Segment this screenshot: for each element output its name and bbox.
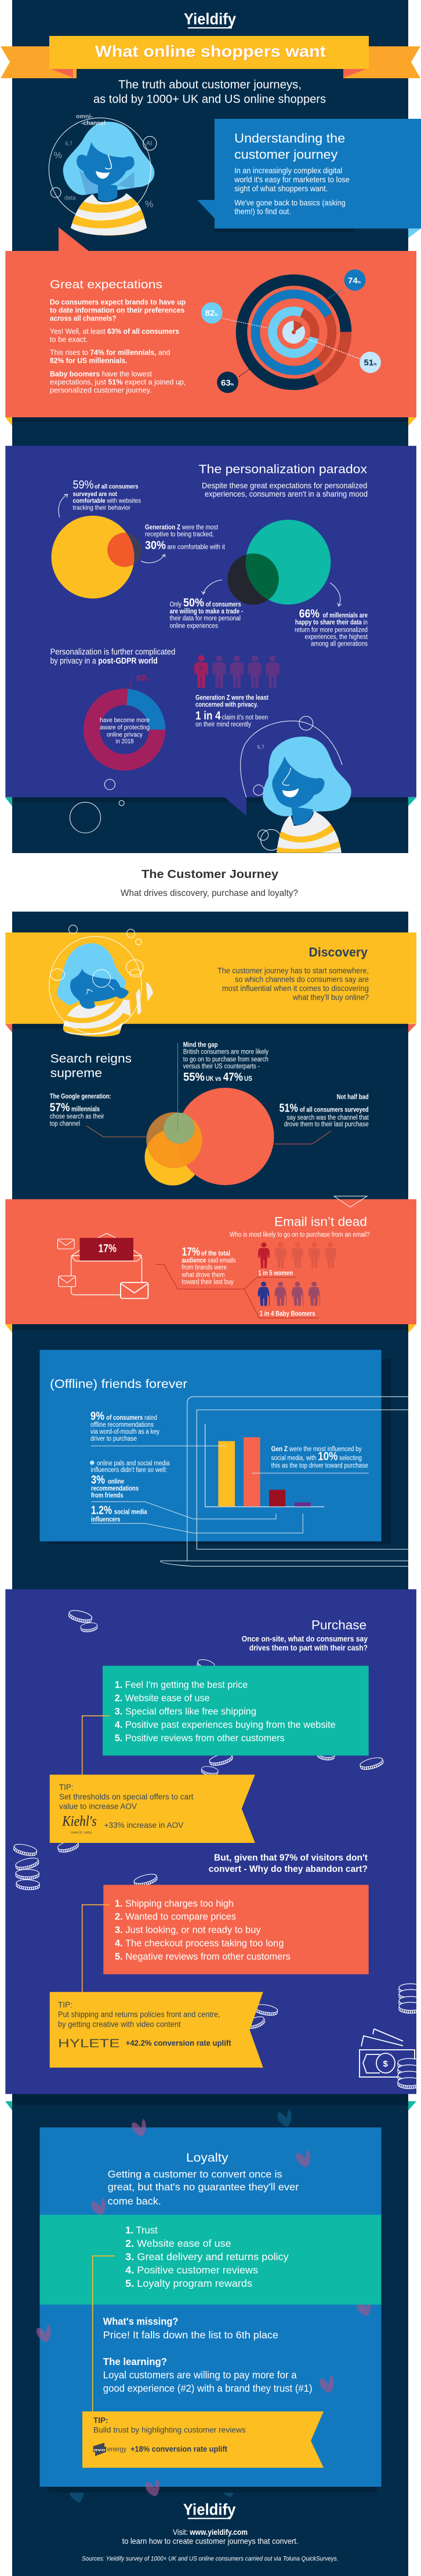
illustration: smiling woman with data ring: omni- (76, 113, 93, 120)
icon: envelope with 17% card (58, 1233, 148, 1299)
arrow: to 66% (331, 583, 342, 606)
callout: tip Kiehl's: Set thresholds on special offers to cart (59, 1792, 194, 1801)
logo: Yieldify footer: Yieldify (183, 2500, 236, 2518)
list: abandon reasons (103, 1885, 369, 1974)
icon: laptop outline (160, 1397, 408, 1566)
list: purchase drivers (103, 1666, 369, 1755)
stat text: google generation (50, 1094, 111, 1128)
connector: tip 1 (82, 1716, 110, 1775)
stat text: 50%: online experiences (170, 622, 218, 629)
stat text: gen z social: social media, with 10% selecting (271, 1450, 362, 1463)
text block: what's missing: What's missing? (103, 2316, 178, 2327)
stat text: generation Z 30%: Generation Z were the most (145, 524, 219, 531)
list: loyalty drivers (39, 2215, 382, 2305)
stat text: online pals: 3% (91, 1474, 105, 1486)
chart: concentric expectation rings (222, 263, 363, 402)
stat text: online pals: online pals and social media (97, 1460, 170, 1467)
stat text: not half bad (280, 1094, 369, 1128)
heading: search reigns supreme (50, 1052, 132, 1080)
stat text: 59%: surveyed are not (73, 491, 117, 498)
leader lines: email (155, 1265, 319, 1318)
arrow: to 50% (202, 580, 222, 594)
callout: tip Kiehl's (50, 1775, 255, 1843)
chart: privacy donut 82%: have become more (100, 717, 150, 724)
panel: great expectations (5, 227, 416, 426)
stat text: 50%: of consumers (206, 602, 241, 609)
text block: discovery copy: what they'll buy online? (292, 993, 369, 1002)
stat text: 17%: audience said emails (182, 1258, 236, 1265)
stat text: mind the gap: versus their US counterparts - (183, 1063, 260, 1070)
stat text: 17%: from brands were (182, 1265, 227, 1271)
stat text: online pals: influencers (91, 1516, 120, 1523)
text block: loyalty intro: come back. (108, 2195, 161, 2207)
panel: loyalty (37, 2119, 382, 2497)
text block: understanding intro: In an increasingly complex digital (234, 166, 342, 175)
stat bubble: 82% (201, 303, 223, 323)
text block: expectations copy: 82% for US millennials. (50, 357, 128, 365)
callout: tip OVO energy: Build trust by highlighting customer reviews (93, 2426, 246, 2435)
heading: offline friends: (Offline) friends forever (50, 1377, 187, 1391)
icon: five women (258, 1243, 336, 1268)
callout: tip Kiehl's: TIP: (59, 1783, 74, 1791)
heading: understanding (234, 131, 345, 162)
stat text: online pals: social media (114, 1509, 147, 1515)
connector: tip 3 (93, 2256, 115, 2411)
illustration: woman concerned with privacy (257, 737, 351, 853)
text block: abandon question (209, 1853, 368, 1874)
stat text: generation Z 30% (145, 524, 226, 552)
text block: expectations copy: Baby boomers have the lowest (50, 370, 153, 378)
stat text: 59%: of all consumers (95, 483, 138, 490)
stat text: 17%: 17% (182, 1246, 200, 1259)
chart: social drivers bars (205, 1424, 324, 1507)
list: loyalty drivers: 4. Positive customer reviews (125, 2264, 258, 2276)
text block: expectations copy: Yes! Well, at least 63% of all consumers (50, 327, 179, 336)
venn: tracking comfort (51, 516, 141, 599)
list: abandon reasons: 5. Negative reviews from other customers (115, 1951, 291, 1962)
text block: understanding intro: them!) to find out. (234, 206, 291, 216)
heading: loyalty: Loyalty (186, 2151, 228, 2165)
text block: understanding intro: sight of what shoppers want. (234, 184, 328, 193)
list: purchase drivers: 5. Positive reviews from other customers (115, 1732, 285, 1743)
stat text: 1 in 4: Generation Z were the least (195, 695, 268, 702)
illustration: smiling woman with data ring: % (145, 199, 153, 209)
stat text: 1 in 4: on their mind recently (195, 722, 251, 728)
callout: tip OVO energy: ovo (94, 2448, 106, 2453)
text block: expectations copy: expectations, just 51% expect a joined up, (50, 378, 186, 386)
icons: dark hearts behind loyalty card (69, 2109, 292, 2502)
callout: tip OVO energy: energy (107, 2445, 126, 2453)
text block: discovery copy: most influential when it comes to discovering (222, 983, 369, 993)
text block: discovery copy (217, 965, 369, 1002)
stat text: 66%: experiences, the highest (305, 634, 368, 641)
illustration: smiling woman with data ring: AI (146, 140, 152, 147)
stat text: 50%: 50% (183, 597, 204, 610)
stat bubble: 74% (344, 269, 365, 291)
text block: what's missing (103, 2316, 278, 2341)
list: abandon reasons: 4. The checkout process taking too long (115, 1937, 284, 1948)
subheading: what drives discovery: What drives discovery, purchase and loyalty? (121, 888, 298, 898)
stat text: google generation: 57% (50, 1102, 70, 1114)
stat text: online pals (90, 1460, 170, 1523)
stat text: gen z social (271, 1446, 368, 1470)
venn: data trade (227, 520, 331, 605)
callout: tip Hylete: Put shipping and returns policies front and centre, (58, 2010, 220, 2019)
text block: the learning: The learning? (103, 2356, 167, 2367)
stat text: online pals: from friends (91, 1492, 123, 1499)
heading: personalization paradox: The personalization paradox (199, 463, 368, 476)
text block: discovery copy: so which channels do consumers say are (235, 975, 369, 984)
callout: tip OVO energy: +18% conversion rate uplift (130, 2445, 227, 2454)
icon: banknote and coins: $ (383, 2059, 389, 2069)
callout: tip Kiehl's: Kiehl's (62, 1814, 97, 1830)
label: 1 in 4 baby boomers: 1 in 4 Baby Boomers (260, 1311, 315, 1318)
stat text: mind the gap: Mind the gap (183, 1042, 218, 1049)
subtitle (93, 79, 326, 106)
decorative data circles around privacy woman (70, 716, 342, 850)
text block: the learning: good experience (#2) with a brand they trust (#1) (103, 2382, 313, 2394)
illustration: smiling woman with data ring: data (64, 195, 76, 201)
banner ribbon with title: What online shoppers want (95, 42, 326, 60)
stat text: google generation: top channel (50, 1121, 80, 1128)
stat text: 17%: what drove them (182, 1272, 225, 1279)
leader lines: search venn (86, 1043, 331, 1144)
callout: tip OVO energy (82, 2411, 324, 2468)
stat text: 50% (170, 597, 243, 629)
chart: privacy donut 82% (89, 673, 160, 765)
list: purchase drivers: 4. Positive past experiences buying from the website (115, 1719, 336, 1730)
chart: privacy donut 82%: 82% (136, 673, 150, 683)
panel: the personalization paradox (5, 446, 416, 816)
banner ribbon with title (1, 36, 420, 78)
stat text: generation Z 30%: are comfortable with it (167, 544, 226, 551)
heading: understanding: customer journey (234, 147, 337, 162)
list: abandon reasons: 3. Just looking, or not ready to buy (115, 1925, 261, 1936)
stat bubble: 63% (217, 371, 238, 393)
heading: purchase: Purchase (311, 1618, 366, 1633)
subtitle: as told by 1000+ UK and US online shoppers (93, 93, 326, 106)
stat text: google generation: The Google generation: (50, 1094, 111, 1101)
label: 1 in 5 women: 1 in 5 women (258, 1270, 293, 1277)
text block: understanding intro: We've gone back to basics (asking (234, 198, 346, 207)
stat text: 50%: their data for more personal (170, 615, 241, 622)
icon: envelope with 17% card: 17% (99, 1243, 117, 1255)
text block: expectations copy: across all channels? (50, 314, 116, 322)
stat bubble: 82%: 82% (205, 308, 218, 318)
logo: Yieldify top: Yieldify (184, 10, 236, 28)
stat text: online pals: recommendations (91, 1485, 139, 1492)
stat text: online pals: influencers didn't fare so well: (90, 1467, 167, 1474)
text block: loyalty intro (108, 2169, 299, 2207)
text block: paradox intro (202, 481, 368, 498)
heading: the customer journey: The Customer Journey (141, 868, 279, 881)
stat bubble: 63%: 63% (221, 378, 234, 388)
text block: purchase question: Once on-site, what do consumers say (242, 1634, 368, 1643)
stat text: generation Z 30%: receptive to being tracked, (145, 531, 214, 538)
text block: footer call to action: Visit: www.yieldify.com (173, 2527, 248, 2537)
stat text: gen z social: Gen Z were the most influenced by (271, 1446, 362, 1453)
text block: GDPR: by privacy in a post-GDPR world (50, 656, 158, 666)
stat text: 17% (182, 1246, 236, 1286)
icon: five generation Z figures (194, 655, 280, 688)
illustration: smiling woman with data ring: 6,7 (65, 141, 72, 147)
icons: pink hearts over loyalty card (37, 2119, 371, 2497)
stat text: 66%: happy to share their data in (295, 620, 368, 626)
stat text: 9%: 9% (90, 1410, 104, 1423)
stat text: 59%: tracking their behavior (73, 504, 130, 511)
list: purchase drivers: 2. Website ease of use (115, 1692, 210, 1703)
panel: email isn't dead (5, 1196, 416, 1333)
stat text: not half bad: say search was the channel that (286, 1114, 369, 1121)
stat text: 66%: among all generations (311, 641, 368, 648)
panel: (offline) friends forever (39, 1350, 408, 1566)
venn: search channels (145, 1088, 274, 1186)
stat text: 1 in 4: claim it's not been (222, 715, 268, 722)
stat text: 17%: toward their last buy (182, 1279, 234, 1286)
stat bubble: 74%: 74% (348, 276, 361, 286)
text block: expectations copy: This rises to 74% for millennials, and (50, 349, 170, 357)
stat text: google generation: millennials (71, 1106, 100, 1113)
callout: tip Kiehl's: value to increase AOV (59, 1802, 137, 1811)
stat text: 50%: are willing to make a trade - (170, 609, 243, 615)
text block: purchase question: drives them to part with their cash? (249, 1643, 368, 1652)
callout: tip OVO energy: TIP: (93, 2416, 108, 2425)
stat text: 66%: return for more personalized (295, 627, 368, 634)
icon: four baby boomers (258, 1282, 320, 1306)
stat text: 59% (73, 479, 141, 511)
stat text: not half bad: of all consumers surveyed (300, 1106, 369, 1113)
list: loyalty drivers: 5. Loyalty program rewards (125, 2278, 252, 2289)
callout: tip Hylete: HYLETE (58, 2038, 119, 2050)
stat text: mind the gap (183, 1042, 268, 1084)
stat text: online pals: 1.2% (91, 1504, 112, 1517)
stat text: online pals: online (108, 1478, 124, 1485)
text block: what's missing: Price! It falls down the list to 6th place (103, 2329, 278, 2341)
text block: discovery copy: The customer journey has to start somewhere, (217, 965, 369, 975)
text block: footer call to action: to learn how to create customer journeys that convert. (122, 2537, 298, 2546)
callout: tip Kiehl's: +33% increase in AOV (104, 1821, 183, 1830)
background: navy page panel lower (12, 912, 408, 2576)
list: purchase drivers: 1. Feel I'm getting the best price (115, 1679, 248, 1690)
stat text: 9%: of consumers rated (106, 1415, 157, 1422)
stat text: 9%: offline recommendations (90, 1422, 154, 1429)
panel: understanding the customer journey (197, 119, 421, 238)
stat text: 9%: driver to purchase (90, 1435, 137, 1442)
icon: banknote and coins (360, 2029, 421, 2089)
text block: expectations copy: to be exact. (50, 336, 88, 344)
illustration: smiling woman with data ring: -channel (81, 120, 106, 127)
text block: purchase question (242, 1634, 368, 1652)
panel: purchase (5, 1589, 421, 2111)
list: purchase drivers: 3. Special offers like free shipping (115, 1706, 256, 1717)
text block: loyalty intro: great, but that's no guarantee they'll ever (108, 2181, 299, 2192)
stat text: 66% (295, 608, 368, 648)
stat bubble: 51%: 51% (364, 358, 377, 368)
stat text: mind the gap: US (244, 1076, 252, 1083)
heading: great expectations: Great expectations (50, 279, 162, 292)
stat text: generation Z 30%: 30% (145, 539, 166, 552)
stat text: 59%: 59% (73, 479, 94, 491)
list: abandon reasons: 1. Shipping charges too high (115, 1898, 234, 1909)
text block: abandon question: convert - Why do they abandon cart? (209, 1864, 368, 1874)
text block: GDPR (50, 647, 175, 666)
chart: privacy donut 82%: in 2018 (116, 738, 133, 745)
illustration: woman concerned with privacy: 6,7 (257, 744, 264, 750)
stat text: gen z social: this as the top driver toward purchase (271, 1463, 368, 1470)
background: navy page panel top (12, 0, 408, 853)
stat text: 66%: of millennials are (322, 613, 368, 620)
text block: paradox intro: Despite these great expectations for personalized (202, 481, 367, 490)
stat text: 17%: of the total (201, 1251, 230, 1258)
arrow: to 59% (59, 494, 68, 518)
list: loyalty drivers: 3. Great delivery and returns policy (125, 2251, 289, 2262)
text block: loyalty intro: Getting a customer to convert once is (108, 2169, 282, 2180)
stat bubble: 51% (360, 352, 381, 373)
arrow: to 30% (141, 554, 165, 563)
stat text: 66%: 66% (299, 608, 320, 621)
callout: tip Kiehl's: SINCE 1851 (71, 1831, 93, 1834)
stat text: 9% (90, 1410, 159, 1442)
list: loyalty drivers: 1. Trust (125, 2224, 158, 2236)
text block: GDPR: Personalization is further complicated (50, 647, 175, 657)
list: abandon reasons: 2. Wanted to compare prices (115, 1911, 236, 1922)
stat text: mind the gap: to go on to purchase from search (183, 1056, 268, 1063)
chart: privacy donut 82%: online privacy (107, 731, 143, 738)
text block: expectations copy: Do consumers expect brands to have up (50, 298, 186, 306)
stat text: 1 in 4: concerned with privacy. (195, 702, 258, 709)
stat text: 59%: comfortable with websites (73, 498, 141, 505)
text block: expectations copy: to date information on their preferences (50, 306, 185, 314)
text block: understanding intro: world it's easy for marketers to lose (234, 175, 350, 184)
heading: discovery: Discovery (309, 945, 368, 960)
list: loyalty drivers: 2. Website ease of use (125, 2238, 231, 2249)
stat text: mind the gap: 47% (223, 1071, 243, 1084)
stat text: google generation: chose search as their (50, 1113, 104, 1120)
stat text: 1 in 4 (195, 695, 268, 728)
heading: search reigns supreme: Search reigns (50, 1052, 132, 1065)
stat text: not half bad: Not half bad (337, 1094, 369, 1101)
text block: sources: Sources: Yieldify survey of 1000+ UK and US online consumers carried out via Toluna QuickSurveys. (82, 2555, 338, 2562)
text block: paradox intro: experiences, consumers aren't in a sharing mood (205, 489, 368, 498)
stat text: mind the gap: 55% (183, 1071, 205, 1084)
chart: privacy donut 82%: aware of protecting (100, 724, 150, 731)
stat text: mind the gap: UK vs (206, 1076, 222, 1083)
callout: tip Hylete: by getting creative with video content (58, 2020, 181, 2028)
stat text: not half bad: 51% (280, 1102, 298, 1114)
text block: abandon question: But, given that 97% of visitors don't (214, 1853, 368, 1863)
subheading: who purchases from email: Who is most likely to go on to purchase from an email? (230, 1231, 370, 1238)
illustration: smiling woman with data ring (49, 113, 157, 239)
text block: expectations copy (50, 298, 186, 394)
stat text: not half bad: drove them to their last purchase (284, 1121, 369, 1128)
stat text: 50%: Only (170, 602, 182, 609)
stat text: mind the gap: British consumers are more likely (183, 1049, 268, 1056)
illustration: woman with magnifying glass (49, 925, 153, 1037)
stat text: 9%: via word-of-mouth as a key (90, 1429, 159, 1435)
panel: discovery (5, 932, 416, 1033)
text block: the learning: Loyal customers are willing to pay more for a (103, 2369, 297, 2381)
icon: five generation Z figures: Z (199, 665, 203, 671)
text block: understanding intro (234, 166, 350, 216)
heading: search reigns supreme: supreme (50, 1066, 102, 1080)
connector: tip 2 (82, 1905, 110, 1992)
heading: email isn't dead: Email isn’t dead (274, 1215, 367, 1229)
illustration: smiling woman with data ring: % (54, 151, 62, 161)
leader lines: offline chart (91, 1446, 369, 1533)
subtitle: The truth about customer journeys, (118, 79, 302, 92)
callout: tip Hylete: TIP: (58, 2001, 72, 2009)
text block: expectations copy: personalized customer journey. (50, 386, 152, 394)
stat text: 1 in 4: 1 in 4 (195, 710, 221, 723)
callout: tip Hylete: +42.2% conversion rate uplift (126, 2039, 231, 2047)
text block: the learning (103, 2356, 313, 2394)
heading: understanding: Understanding the (234, 131, 345, 145)
text block: footer call to action (122, 2527, 298, 2546)
callout: tip Hylete (50, 1992, 263, 2068)
icon: scattered coins (13, 1609, 421, 2031)
